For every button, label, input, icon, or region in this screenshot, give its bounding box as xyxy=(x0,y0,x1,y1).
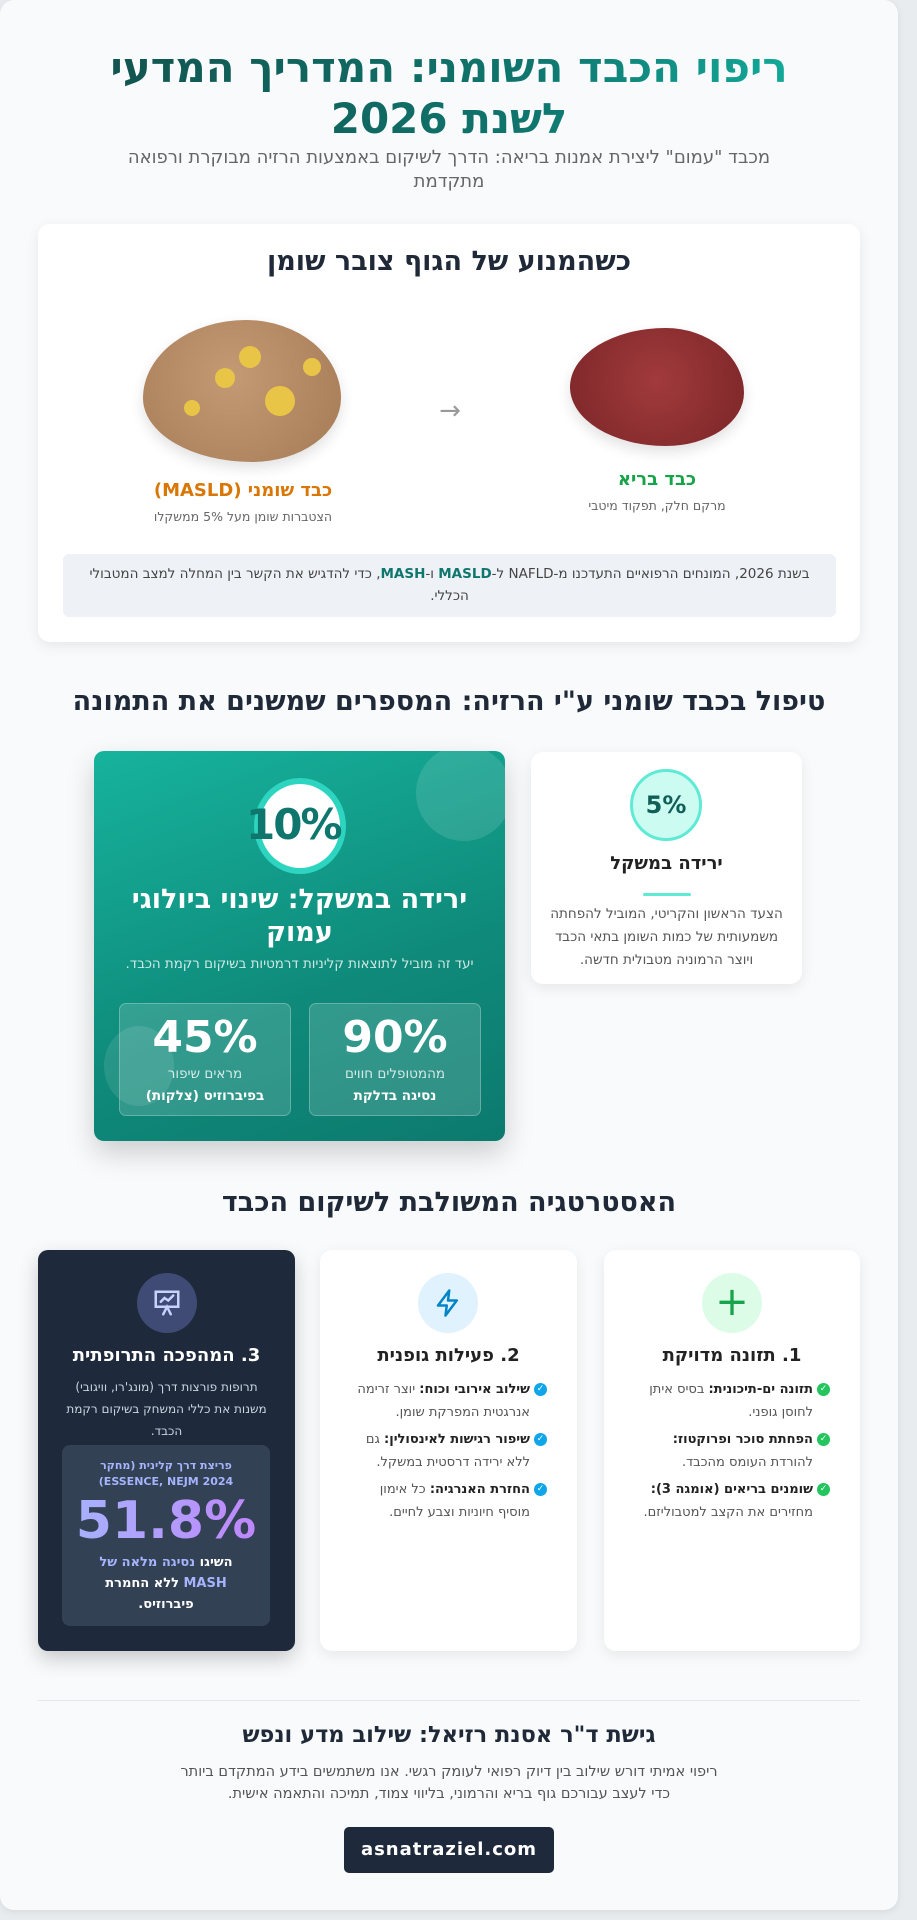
subtitle: מכבד "עמום" ליצירת אמנות בריאה: הדרך לשיקום באמצעות הרזיה מבוקרת ורפואה xyxy=(128,147,770,168)
callout: 51.8% xyxy=(62,1445,270,1626)
note box: הכללי. xyxy=(430,588,469,604)
heading: עמוק xyxy=(266,917,333,948)
bullets: אנרגטית המפרקת שומן. xyxy=(395,1405,530,1420)
title xyxy=(30,42,868,144)
title: ריפוי הכבד השומני: המדריך המדעי xyxy=(110,43,788,92)
panel: physical activity: ללא ירידה דרסטית במשקל. xyxy=(376,1455,530,1470)
stat: 90%: 90% xyxy=(342,1012,448,1063)
stat circle 5% xyxy=(630,769,702,841)
panel: physical activity: ✓ xyxy=(537,1384,544,1394)
panel: drug revolution xyxy=(38,1250,295,1651)
description: משנות את כללי המשחק בשיקום רקמת xyxy=(66,1402,267,1416)
label: fatty liver: הצטברות שומן מעל 5% ממשקלו xyxy=(154,509,332,524)
panel: physical activity: ✓ xyxy=(537,1434,544,1444)
button: website xyxy=(344,1827,554,1873)
stat: 90% xyxy=(309,1003,481,1116)
panel: 10% card xyxy=(94,751,505,1141)
note box xyxy=(63,554,836,617)
panel: 5% card xyxy=(531,752,802,984)
label: healthy liver: מרקם חלק, תפקוד מיטבי xyxy=(588,498,726,513)
bullets: תזונה ים-תיכונית: בסיס איתן לחוסן גופני. xyxy=(649,1382,813,1420)
subtitle: מתקדמת xyxy=(414,171,484,192)
callout: 51.8%: פריצת דרך קלינית (מחקר xyxy=(100,1459,232,1472)
footer text: ריפוי אמיתי דורש שילוב בין דיוק רפואי לעומק רגשי. אנו משתמשים בידע המתקדם ביותר xyxy=(180,1764,718,1780)
icon: lightning xyxy=(418,1273,478,1333)
heading: ירידה במשקל: שינוי ביולוגי xyxy=(132,884,467,915)
panel: nutrition xyxy=(604,1250,860,1651)
icon: fatty liver xyxy=(143,320,341,462)
footer text xyxy=(180,1764,718,1802)
section heading: strategy: האסטרטגיה המשולבת לשיקום הכבד xyxy=(222,1187,676,1218)
description: תרופות פורצות דרך (מונג'רו, וויגובי) xyxy=(75,1380,258,1394)
stat: 90%: נסיגה בדלקת xyxy=(354,1088,436,1104)
callout: 51.8%: פיברוזיס. xyxy=(138,1597,194,1612)
icon: plus xyxy=(702,1273,762,1333)
text xyxy=(550,906,783,968)
label: fatty liver xyxy=(154,480,332,524)
stat circle 10% xyxy=(254,778,346,874)
stat: 45%: 45% xyxy=(152,1012,258,1063)
label: fatty liver: כבד שומני (MASLD) xyxy=(154,480,332,501)
panel: physical activity: ✓ xyxy=(537,1484,544,1494)
panel heading: כשהמנוע של הגוף צובר שומן xyxy=(267,246,631,277)
title: 2. פעילות גופנית xyxy=(377,1345,520,1366)
stat: 90%: מהמטופלים חווים xyxy=(345,1066,445,1082)
stat: 45%: מראים שיפור xyxy=(168,1066,242,1082)
callout: 51.8%: 51.8% xyxy=(76,1491,256,1551)
title: 3. המהפכה התרופתית xyxy=(73,1345,260,1366)
heading: ירידה במשקל xyxy=(610,853,723,874)
text: משמעותית של כמות השומן בתאי הכבד xyxy=(555,929,778,945)
description: הכבד. xyxy=(151,1424,182,1438)
callout: 51.8%: השיגו נסיגה מלאה של xyxy=(99,1555,233,1570)
panel: nutrition: ✓ xyxy=(820,1384,827,1394)
label: healthy liver: כבד בריא xyxy=(618,469,696,490)
bullets xyxy=(357,1382,547,1420)
panel: nutrition: להורדת העומס מהכבד. xyxy=(682,1455,813,1470)
button: website: asnatraziel.com xyxy=(361,1839,537,1860)
text: הצעד הראשון והקריטי, המוביל להפחתה xyxy=(550,906,783,922)
panel: nutrition: שומנים בריאים (אומגה 3): מחזירים את הקצב למטבוליזם. xyxy=(644,1482,813,1520)
heading xyxy=(132,884,467,948)
stat circle 10%: 10% xyxy=(246,800,341,849)
panel: physical activity xyxy=(320,1250,577,1651)
stat: 45% xyxy=(119,1003,291,1116)
label: healthy liver xyxy=(588,469,726,513)
watermark: asnatraziel.com xyxy=(141,193,855,480)
icon: healthy liver xyxy=(570,328,744,446)
callout: 51.8%: (ESSENCE, NEJM 2024 xyxy=(99,1475,233,1488)
panel: physical activity: החזרת האנרגיה: כל אימון xyxy=(380,1482,530,1497)
subtitle xyxy=(128,147,770,192)
panel: nutrition: הפחתת סוכר ופרוקטוז: xyxy=(673,1432,813,1447)
panel: fatty vs healthy liver xyxy=(38,224,860,642)
title: לשנת 2026 xyxy=(331,94,567,143)
stat circle 5%: 5% xyxy=(646,791,686,819)
description xyxy=(66,1380,267,1438)
panel: physical activity: מוסיף חיוניות וצבע לחיים. xyxy=(389,1505,530,1520)
arrow: → xyxy=(439,396,461,426)
panel: physical activity: שיפור רגישות לאינסולין: גם xyxy=(366,1432,530,1447)
bullets: שילוב אירובי וכוח: יוצר זרימה xyxy=(357,1382,530,1397)
stat: 45%: בפיברוזיס (צלקות) xyxy=(146,1088,264,1104)
icon: chart presentation xyxy=(137,1273,197,1333)
icon: plus: + xyxy=(715,1279,749,1325)
text: ויוצר הרמוניה מטבולית חדשה. xyxy=(580,952,753,968)
note box: בשנת 2026, המונחים הרפואיים התעדכנו מ-NAFLD ל-MASLD ו-MASH, כדי להדגיש את הקשר בין המחלה למצב המטבולי xyxy=(89,566,810,582)
subtext: יעד זה מוביל לתוצאות קליניות דרמטיות בשיקום רקמת הכבד. xyxy=(126,957,473,972)
panel: nutrition: ✓ xyxy=(820,1434,827,1444)
footer text: כדי לעצב עבורכם גוף בריא והרמוני, בליווי צמוד, תמיכה והתאמה אישית. xyxy=(228,1786,670,1802)
callout: 51.8%: MASH ללא החמרת xyxy=(105,1576,227,1591)
title: 1. תזונה מדויקת xyxy=(663,1345,801,1366)
footer heading: גישת ד"ר אסנת רזיאל: שילוב מדע ונפש xyxy=(242,1722,656,1748)
section heading: weight loss numbers: טיפול בכבד שומני ע"י הרזיה: המספרים שמשנים את התמונה xyxy=(73,686,825,717)
panel: nutrition: ✓ xyxy=(820,1484,827,1494)
